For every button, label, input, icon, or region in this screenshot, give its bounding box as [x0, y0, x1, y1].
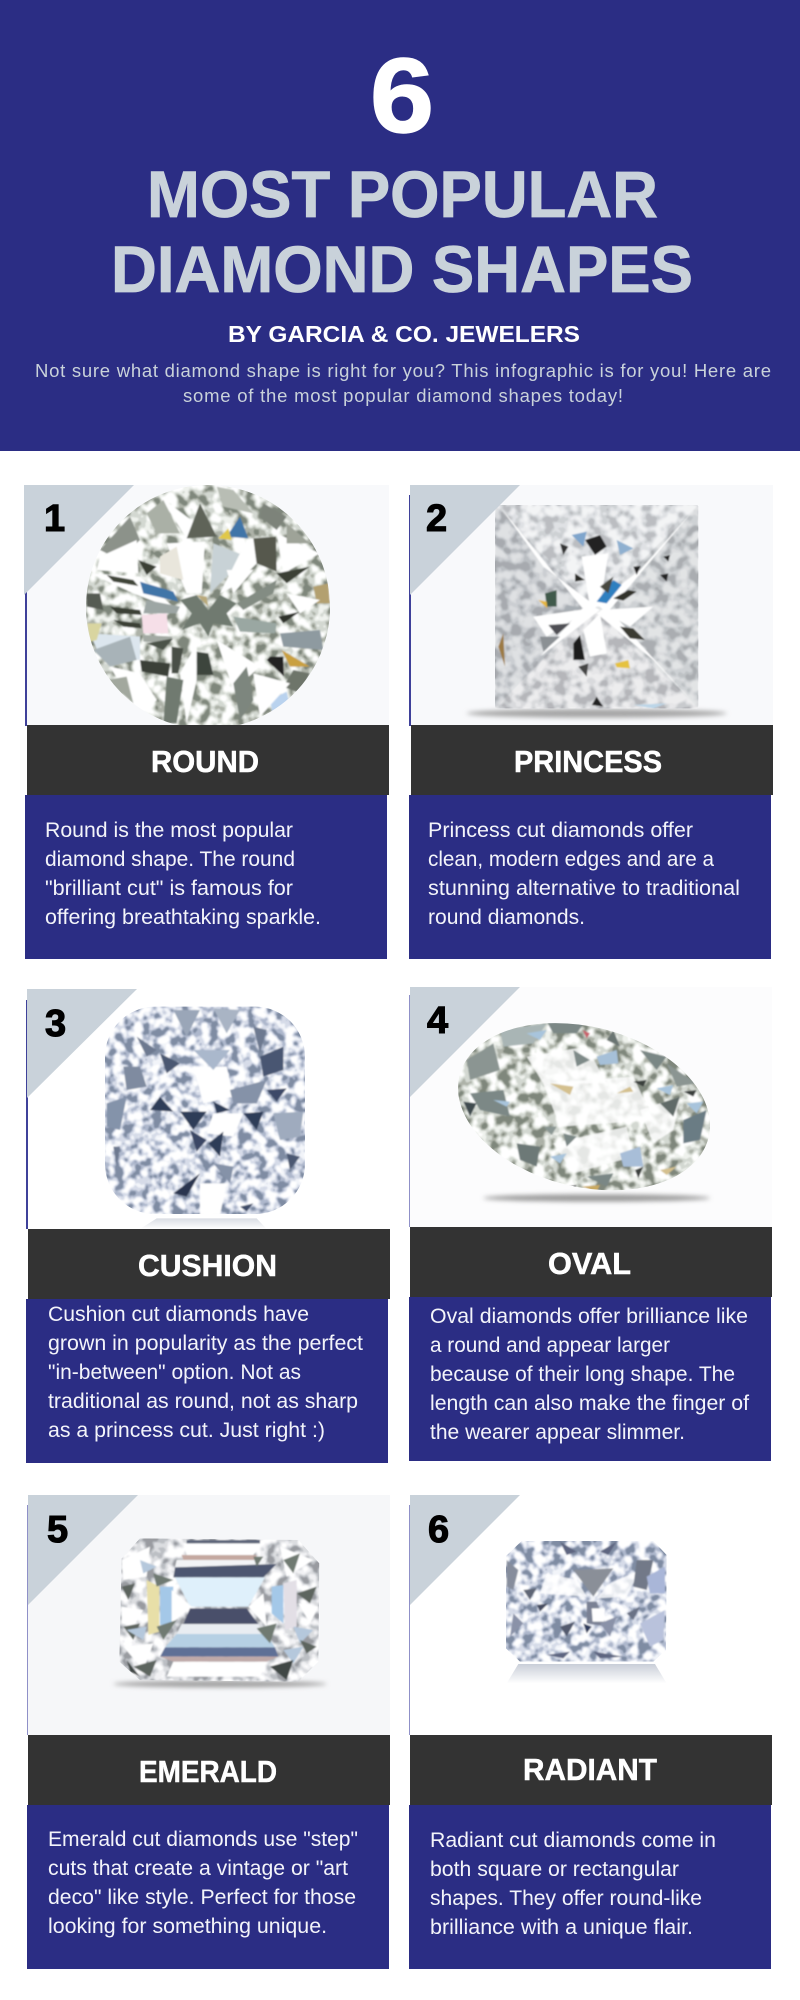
diamond: emerald — [118, 1537, 322, 1683]
panel: 4 oval — [409, 987, 772, 1461]
description: emerald: Emerald cut diamonds use "step" — [48, 1828, 358, 1851]
name bar: princess — [411, 725, 773, 795]
description: princess: stunning alternative to traditional — [428, 877, 740, 900]
description: cushion: Cushion cut diamonds have — [48, 1303, 309, 1326]
diamond: cushion — [103, 1005, 307, 1216]
name bar: oval: OVAL — [548, 1246, 631, 1281]
number badge: 2 — [410, 485, 520, 595]
number badge: 1: 1 — [44, 498, 65, 540]
description: radiant — [409, 1805, 771, 1969]
diamond: princess — [493, 503, 700, 710]
number badge: 1 — [24, 485, 134, 595]
diamond shadow: emerald — [113, 1681, 327, 1687]
number badge: 4: 4 — [427, 1000, 448, 1042]
description: round: Round is the most popular — [45, 819, 293, 842]
description: radiant: Radiant cut diamonds come in — [430, 1829, 716, 1852]
reflection: cushion — [140, 1218, 267, 1229]
name bar: round — [27, 725, 389, 795]
description: round — [25, 795, 387, 959]
name bar: round: ROUND — [151, 744, 259, 779]
big number 6: 6 — [370, 37, 434, 155]
description: emerald: cuts that create a vintage or "art — [48, 1857, 348, 1880]
description: emerald — [27, 1805, 389, 1969]
description: oval: a round and appear larger — [430, 1334, 670, 1357]
number badge: 4 — [410, 987, 520, 1097]
description: round: diamond shape. The round — [45, 848, 295, 871]
panel: 1 round — [24, 483, 389, 959]
panel: 5 emerald — [27, 1495, 390, 1969]
diamond shadow: princess — [467, 709, 727, 718]
description: oval: length can also make the finger of — [430, 1392, 749, 1415]
reflection: radiant — [507, 1664, 667, 1683]
number badge: 6: 6 — [428, 1509, 449, 1551]
description: cushion: traditional as round, not as sharp — [48, 1390, 358, 1413]
description: radiant: brilliance with a unique flair. — [430, 1916, 693, 1939]
description: cushion: as a princess cut. Just right :) — [48, 1419, 325, 1442]
description: princess — [409, 795, 771, 959]
name bar: radiant: RADIANT — [523, 1752, 657, 1787]
panel: 6 radiant — [409, 1495, 772, 1969]
number badge: 3: 3 — [45, 1003, 66, 1045]
description: cushion: "in-between" option. Not as — [48, 1361, 301, 1384]
title: most popular diamond shapes — [111, 157, 693, 306]
description: oval — [409, 1297, 771, 1461]
number badge: 3 — [27, 989, 137, 1098]
description: cushion — [26, 1299, 388, 1463]
title: most popular diamond shapes: MOST POPULAR — [147, 157, 658, 231]
title: most popular diamond shapes: DIAMOND SHAPES — [111, 232, 693, 306]
name bar: cushion: CUSHION — [138, 1248, 277, 1283]
byline: BY GARCIA & CO. JEWELERS — [228, 321, 580, 347]
description: round: "brilliant cut" is famous for — [45, 877, 293, 900]
description: emerald: deco" like style. Perfect for those — [48, 1886, 356, 1909]
description: radiant: both square or rectangular — [430, 1858, 679, 1881]
description: radiant: shapes. They offer round-like — [430, 1887, 702, 1910]
description: oval: the wearer appear slimmer. — [430, 1421, 685, 1444]
diamond: round — [85, 483, 332, 730]
diamond shadow: oval — [483, 1194, 710, 1202]
description: princess: Princess cut diamonds offer — [428, 819, 693, 842]
description: oval: Oval diamonds offer brilliance like — [430, 1305, 748, 1328]
diamond: radiant — [505, 1540, 668, 1663]
name bar: emerald — [28, 1735, 390, 1805]
diamond: oval — [457, 1017, 713, 1197]
description: princess: clean, modern edges and are a — [428, 848, 714, 871]
number badge: 6 — [410, 1495, 520, 1605]
description: princess: round diamonds. — [428, 906, 585, 929]
header panel — [0, 0, 800, 451]
panel: 3 cushion — [26, 989, 390, 1463]
name bar: oval — [410, 1227, 772, 1297]
name bar: cushion — [28, 1229, 390, 1299]
description: oval: because of their long shape. The — [430, 1363, 735, 1386]
number badge: 5 — [28, 1495, 138, 1605]
description: emerald: looking for something unique. — [48, 1915, 327, 1938]
number badge: 5: 5 — [47, 1509, 68, 1551]
description: cushion: grown in popularity as the perfect — [48, 1332, 363, 1355]
description: round: offering breathtaking sparkle. — [45, 906, 321, 929]
name bar: princess: PRINCESS — [514, 744, 662, 779]
intro text — [35, 360, 771, 406]
number badge: 2: 2 — [426, 498, 447, 540]
name bar: radiant — [410, 1735, 772, 1805]
name bar: emerald: EMERALD — [139, 1754, 277, 1789]
intro text: Not sure what diamond shape is right for you? This infographic is for you! Here are — [35, 360, 771, 381]
intro text: some of the most popular diamond shapes today! — [183, 385, 623, 406]
panel: 2 princess — [409, 485, 773, 959]
